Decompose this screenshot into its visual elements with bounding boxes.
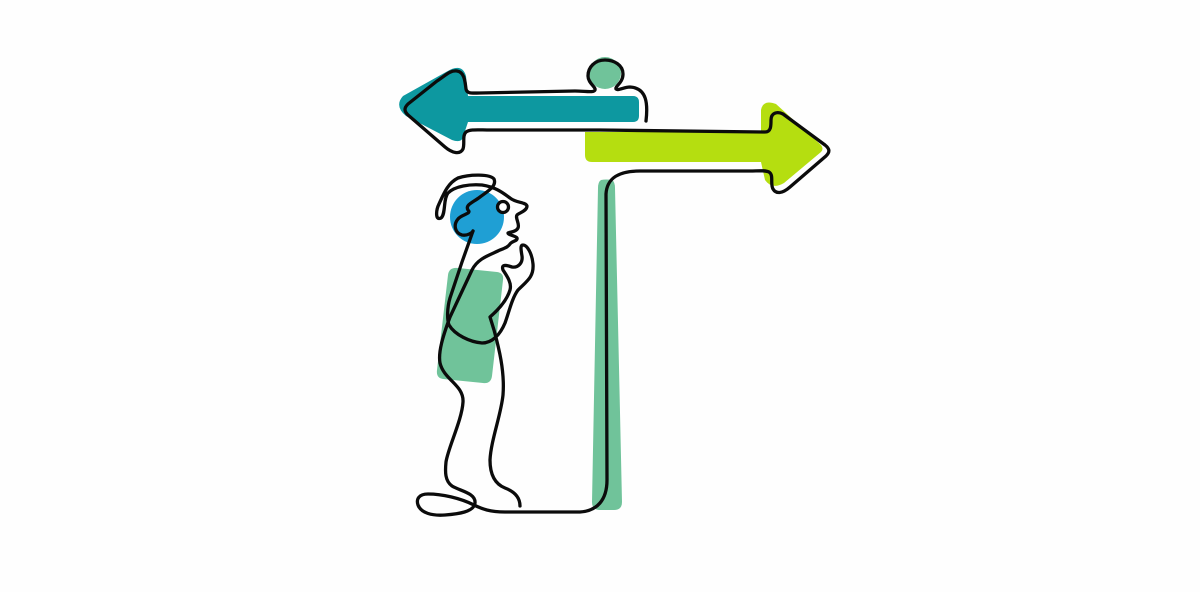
lime right arrow colour block: [585, 102, 822, 186]
outline: person's arm and raised hand: [448, 231, 533, 506]
knob colour circle: [589, 57, 621, 89]
green backpack block: [437, 268, 503, 383]
blue head circle: [450, 190, 504, 244]
teal left arrow colour block: [399, 68, 639, 141]
outline: left arrow and knob: [405, 60, 829, 515]
continuous black outline of arrows, pole and person: [405, 60, 829, 515]
icon: eye: [498, 202, 508, 212]
signpost pole colour block: [592, 180, 622, 510]
